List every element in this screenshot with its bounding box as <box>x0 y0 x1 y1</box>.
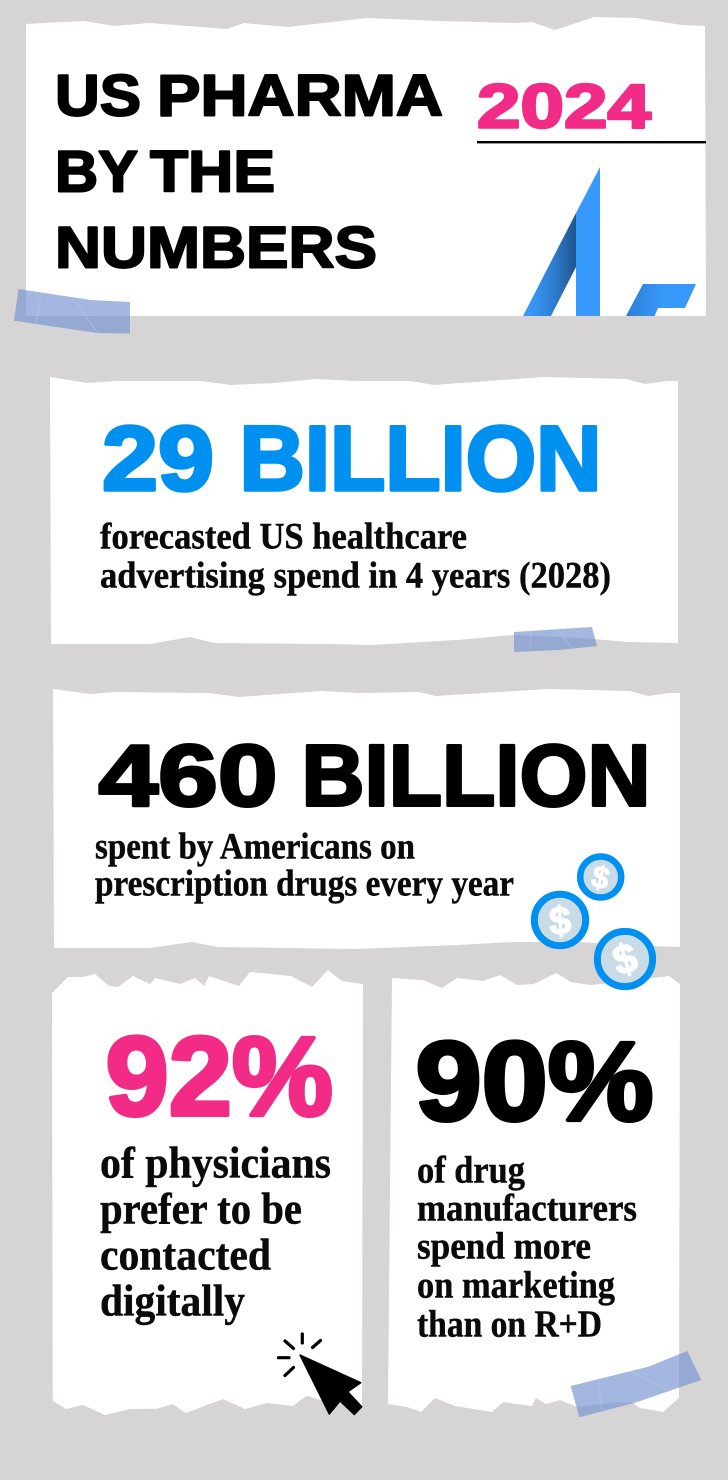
icon: blue logo <box>523 167 696 316</box>
stat: 460 billion: 460 <box>98 728 278 824</box>
title: US <box>55 64 141 128</box>
description: physicians: prefer to be <box>100 1184 302 1234</box>
panel: header <box>14 17 706 334</box>
stat: 460 billion <box>98 728 650 824</box>
description: physicians: of physicians <box>100 1138 331 1188</box>
description: manufacturers: of drug <box>417 1150 525 1192</box>
tape: 90 percent <box>571 1351 701 1417</box>
icon: coins <box>534 856 653 987</box>
title: PHARMA <box>157 64 443 128</box>
description: advertising forecast <box>100 516 611 596</box>
stat: 460 billion: BILLION <box>302 728 650 824</box>
description: manufacturers: than on R+D <box>417 1304 602 1346</box>
icon: cursor click <box>278 1334 362 1414</box>
description: manufacturers: manufacturers <box>417 1188 637 1230</box>
coin: medium: $ <box>548 899 573 944</box>
title <box>55 64 443 280</box>
stat: 92 percent: 92% <box>106 1014 333 1139</box>
description: prescription spend <box>95 826 514 904</box>
panel: 90 percent <box>388 973 701 1417</box>
description: physicians: digitally <box>100 1276 245 1326</box>
year: 2024 <box>477 72 652 142</box>
description: physicians <box>100 1138 331 1326</box>
coin: small: $ <box>588 858 613 897</box>
panel: 29 billion <box>50 377 678 652</box>
title: BY <box>55 140 138 204</box>
title: THE <box>150 140 275 204</box>
description: physicians: contacted <box>100 1230 271 1280</box>
description: prescription spend: prescription drugs every year <box>95 864 514 904</box>
description: prescription spend: spent by Americans on <box>95 826 415 868</box>
description: manufacturers <box>417 1150 637 1346</box>
stat: 29 billion: 29 <box>102 408 214 510</box>
year underline <box>477 141 706 143</box>
description: manufacturers: on marketing <box>417 1264 615 1306</box>
panel: 460 billion <box>53 689 680 949</box>
description: advertising forecast: forecasted US healthcare <box>100 516 467 558</box>
description: manufacturers: spend more <box>417 1226 591 1268</box>
stat: 29 billion: BILLION <box>240 408 602 510</box>
tape: header <box>14 289 130 334</box>
panel: 92 percent <box>52 970 363 1415</box>
description: advertising forecast: advertising spend in 4 years (2028) <box>100 556 611 596</box>
stat: 90 percent: 90% <box>416 1019 654 1144</box>
coin: large: $ <box>608 934 642 984</box>
tape: 29 billion <box>514 627 597 652</box>
title: NUMBERS <box>55 216 377 280</box>
